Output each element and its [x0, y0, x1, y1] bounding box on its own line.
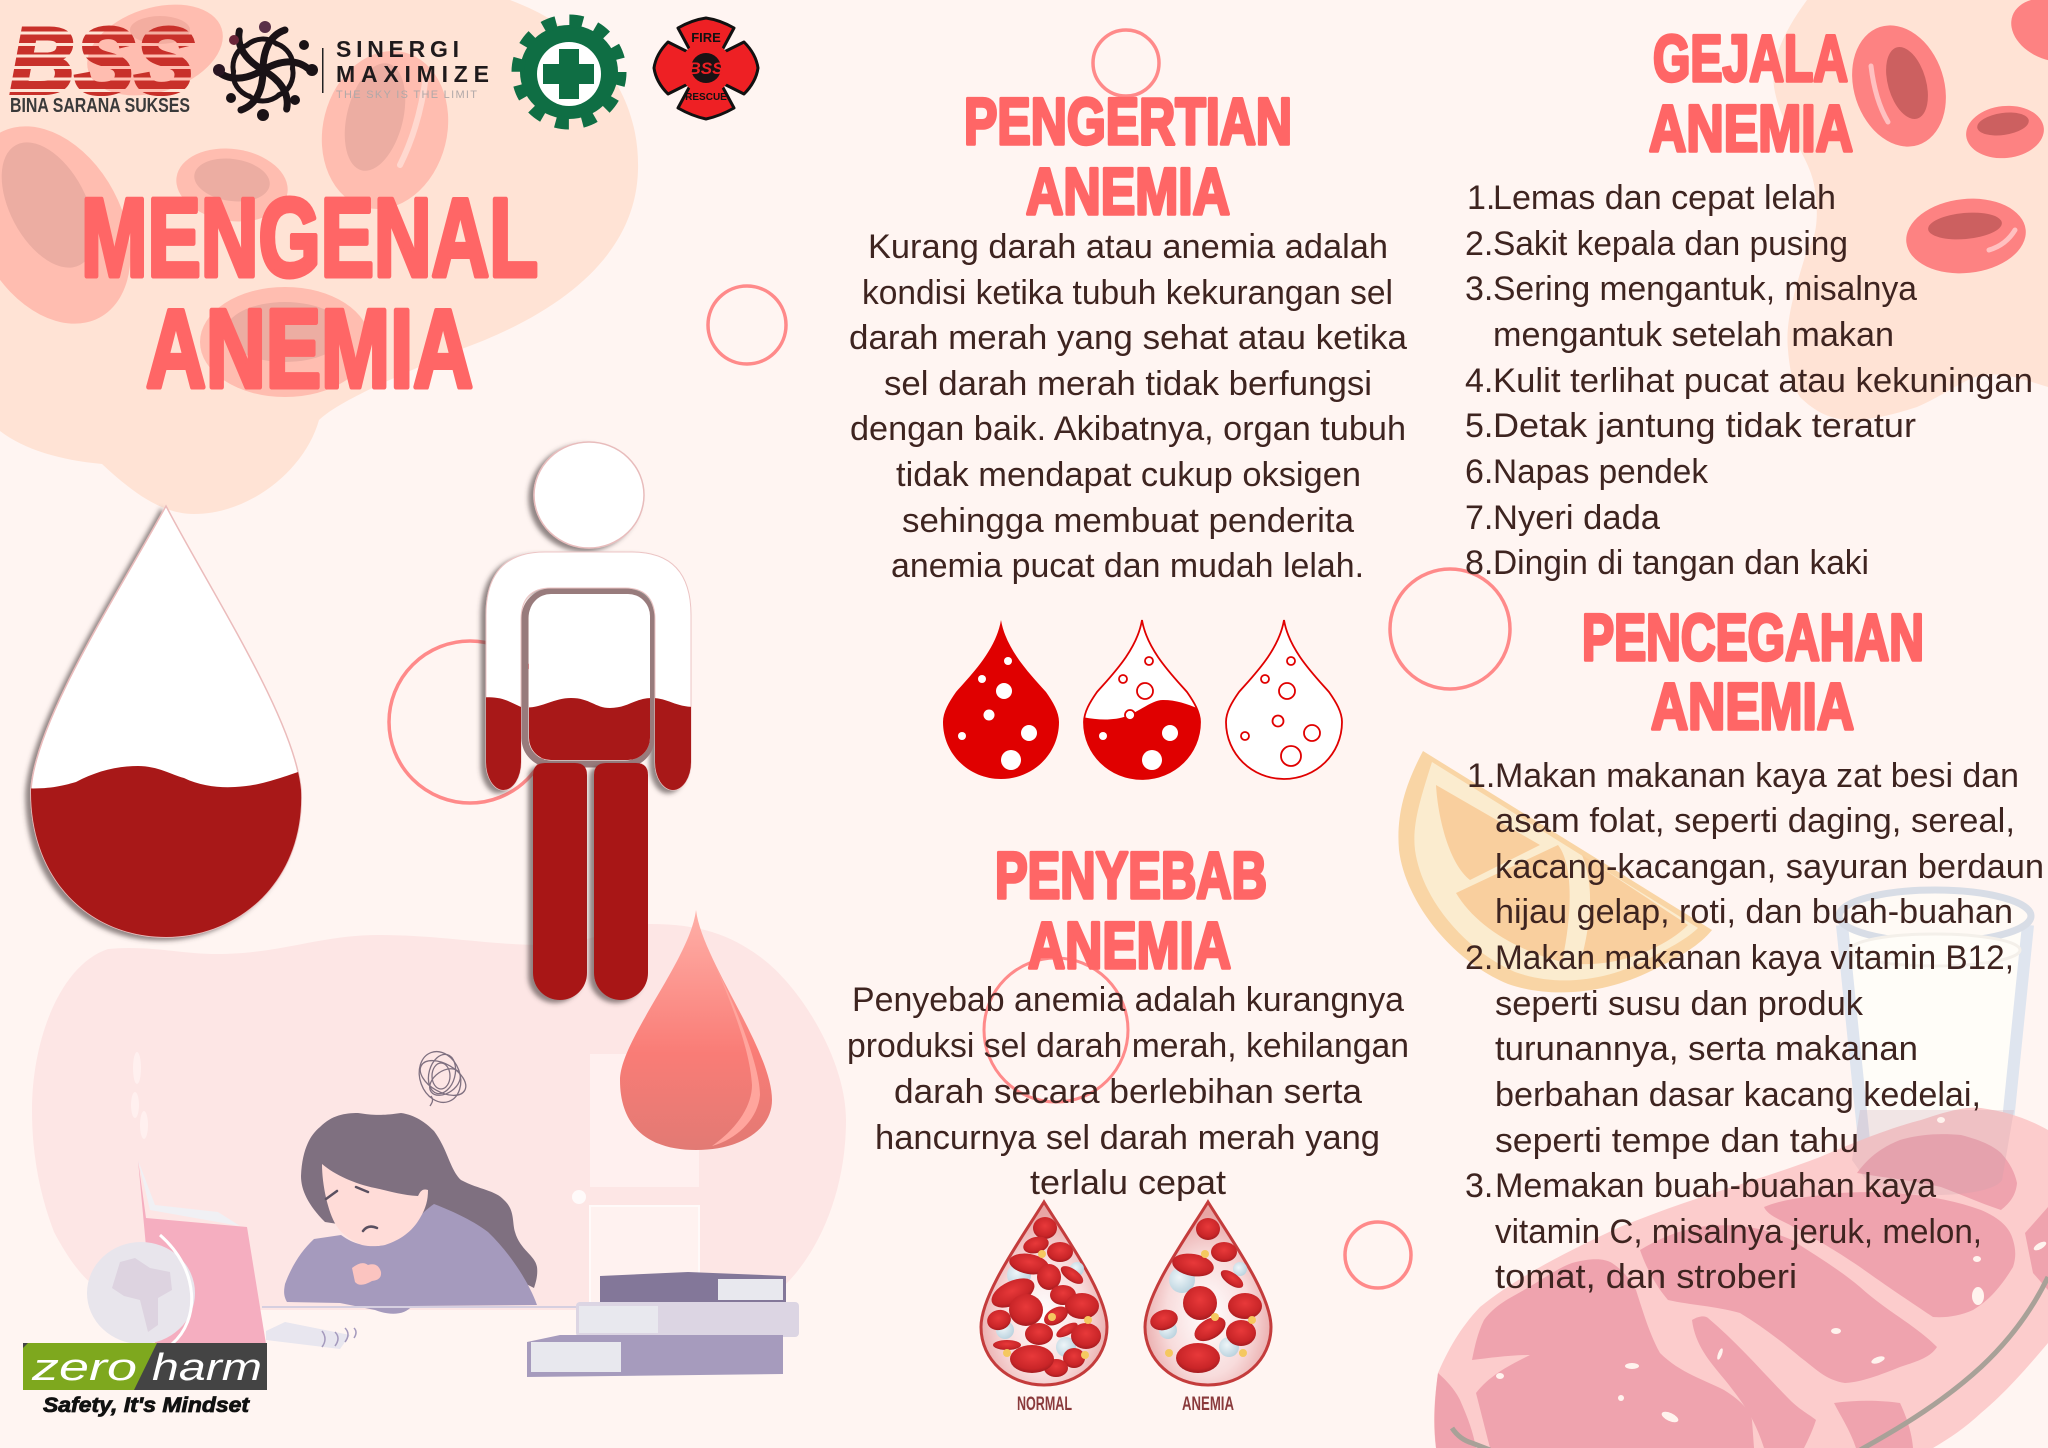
decorative ring, left: [708, 286, 786, 364]
logo: fire rescue badge: FIRE: [691, 30, 721, 45]
list: symptoms of anemia: [1465, 179, 2033, 582]
logo: Bina Sarana Sukses: BSS: [10, 8, 194, 113]
list: prevention of anemia: hijau gelap, roti, dan buah-buahan: [1495, 893, 2013, 931]
list: symptoms of anemia: 1.: [1467, 179, 1495, 217]
glass of milk: [1839, 890, 2031, 1195]
list: symptoms of anemia: 7.: [1465, 499, 1493, 537]
peach blob with blood cells, top right: [1773, 0, 2048, 420]
label: normal: NORMAL: [1017, 1394, 1072, 1415]
title: [81, 176, 538, 411]
heading: pengertian anemia: PENGERTIAN: [964, 84, 1292, 158]
heading: pencegahan anemia: PENCEGAHAN: [1582, 600, 1924, 674]
sweater: [284, 1204, 537, 1314]
list: prevention of anemia: 2.: [1465, 939, 1493, 977]
logo: green safety gear: [518, 21, 620, 123]
notebook: [266, 1322, 356, 1349]
list: symptoms of anemia: Lemas dan cepat lelah: [1493, 179, 1836, 217]
text: definition of anemia: tidak mendapat cukup oksigen: [896, 456, 1361, 494]
logo: fire rescue badge: [654, 18, 758, 119]
logo: Sinergi Maximize: THE SKY IS THE LIMIT: [336, 89, 477, 101]
logo: zero harm: [23, 1343, 267, 1417]
text: causes of anemia: Penyebab anemia adalah kurangnya: [852, 981, 1404, 1019]
text: definition of anemia: [849, 228, 1407, 585]
text: causes of anemia: terlalu cepat: [1030, 1164, 1227, 1202]
list: symptoms of anemia: Kulit terlihat pucat atau kekuningan: [1493, 362, 2033, 400]
list: symptoms of anemia: 6.: [1465, 453, 1493, 491]
illustration: window: [572, 1054, 699, 1310]
heading: penyebab anemia: PENYEBAB: [995, 838, 1267, 912]
list: prevention of anemia: seperti tempe dan tahu: [1495, 1122, 1859, 1160]
heading: pengertian anemia: ANEMIA: [1026, 154, 1230, 228]
logo: fire rescue badge: BSS: [689, 59, 724, 78]
steak on plate: [1434, 1108, 2048, 1448]
decorative ring, lower centre: [984, 958, 1128, 1102]
text: definition of anemia: sehingga membuat penderita: [902, 502, 1354, 540]
list: prevention of anemia: [1465, 757, 2044, 1296]
heading: gejala anemia: [1649, 21, 1853, 165]
list: symptoms of anemia: Detak jantung tidak teratur: [1493, 407, 1916, 445]
icon: full blood drop: [943, 620, 1059, 779]
logo: fire rescue badge: RESCUE: [685, 92, 727, 103]
logo: Bina Sarana Sukses: BINA SARANA SUKSES: [10, 95, 190, 117]
list: symptoms of anemia: Napas pendek: [1493, 453, 1709, 491]
decorative ring, bottom centre: [1345, 1222, 1411, 1288]
list: symptoms of anemia: mengantuk setelah makan: [1493, 316, 1894, 354]
list: symptoms of anemia: 4.: [1465, 362, 1493, 400]
illustration background blob: [32, 924, 846, 1310]
stack of books: [527, 1272, 799, 1377]
large pink drop: [620, 910, 772, 1150]
list: symptoms of anemia: Sering mengantuk, misalnya: [1493, 270, 1917, 308]
list: prevention of anemia: tomat, dan stroberi: [1495, 1258, 1797, 1296]
peach blob with blood cells, top left: [0, 0, 638, 514]
logo: Sinergi Maximize: [213, 21, 489, 121]
logo: zero harm: Safety, It's Mindset: [43, 1394, 250, 1417]
list: prevention of anemia: vitamin C, misalnya jeruk, melon,: [1495, 1213, 1982, 1251]
decorative ring, behind person: [389, 641, 551, 803]
list: symptoms of anemia: Sakit kepala dan pusing: [1493, 225, 1848, 263]
logo: Sinergi Maximize: MAXIMIZE: [336, 61, 489, 87]
diagram: normal blood drop: [981, 1202, 1107, 1385]
heading: gejala anemia: GEJALA: [1653, 21, 1848, 95]
list: prevention of anemia: asam folat, seperti daging, sereal,: [1495, 802, 2015, 840]
title: ANEMIA: [146, 287, 473, 411]
desk line: [262, 1306, 577, 1308]
globe: [87, 1235, 195, 1344]
label: anemia: ANEMIA: [1182, 1394, 1234, 1415]
text: causes of anemia: hancurnya sel darah merah yang: [875, 1119, 1380, 1157]
hair: [301, 1113, 537, 1288]
heading: gejala anemia: ANEMIA: [1649, 91, 1853, 165]
list: prevention of anemia: seperti susu dan produk: [1495, 985, 1864, 1023]
pink book: [138, 1160, 266, 1344]
heading: pencegahan anemia: ANEMIA: [1651, 669, 1854, 743]
decorative ring, top centre: [1093, 30, 1159, 96]
heading: penyebab anemia: ANEMIA: [1028, 908, 1231, 982]
list: prevention of anemia: kacang-kacangan, sayuran berdaun: [1495, 848, 2044, 886]
text: definition of anemia: kondisi ketika tubuh kekurangan sel: [862, 274, 1393, 312]
big blood drop, one third full: [31, 506, 301, 937]
heading: penyebab anemia: [995, 838, 1267, 982]
text: definition of anemia: dengan baik. Akibatnya, organ tubuh: [850, 410, 1406, 448]
diagram: anemia blood drop: [1145, 1202, 1271, 1385]
list: prevention of anemia: berbahan dasar kacang kedelai,: [1495, 1076, 1981, 1114]
text: causes of anemia: produksi sel darah merah, kehilangan: [847, 1027, 1409, 1065]
list: prevention of anemia: Makan makanan kaya zat besi dan: [1495, 757, 2019, 795]
scribble above head: [412, 1046, 472, 1108]
list: prevention of anemia: 1.: [1467, 757, 1495, 795]
faint plant: [131, 1052, 148, 1139]
logo: zero harm: zero: [31, 1347, 137, 1389]
list: prevention of anemia: turunannya, serta makanan: [1495, 1030, 1918, 1068]
face: [322, 1164, 428, 1246]
heading: pencegahan anemia: [1582, 600, 1924, 743]
text: definition of anemia: anemia pucat dan mudah lelah.: [891, 547, 1364, 585]
title: MENGENAL: [81, 176, 538, 300]
text: causes of anemia: darah secara berlebihan serta: [894, 1073, 1362, 1111]
decorative ring, middle right: [1390, 569, 1510, 689]
list: prevention of anemia: Makan makanan kaya vitamin B12,: [1495, 939, 2014, 977]
list: symptoms of anemia: Dingin di tangan dan kaki: [1493, 544, 1869, 582]
icon: empty blood drop: [1226, 620, 1342, 779]
person figure with low blood level: [486, 442, 691, 1000]
list: symptoms of anemia: Nyeri dada: [1493, 499, 1660, 537]
tired woman at desk illustration: [87, 1046, 799, 1377]
list: prevention of anemia: Memakan buah-buahan kaya: [1495, 1167, 1936, 1205]
hand: [352, 1263, 381, 1285]
list: symptoms of anemia: 8.: [1465, 544, 1493, 582]
eyes and mouth: [326, 1187, 377, 1231]
list: symptoms of anemia: 2.: [1465, 225, 1493, 263]
logo: zero harm: harm: [152, 1347, 262, 1389]
icon: half blood drop: [1082, 620, 1202, 785]
list: symptoms of anemia: 3.: [1465, 270, 1493, 308]
orange slice: [1398, 751, 1712, 992]
text: causes of anemia: [847, 981, 1409, 1202]
text: definition of anemia: sel darah merah tidak berfungsi: [884, 365, 1372, 403]
logo: Sinergi Maximize: SINERGI: [336, 36, 459, 62]
heading: pengertian anemia: [964, 84, 1292, 228]
list: symptoms of anemia: 5.: [1465, 407, 1493, 445]
text: definition of anemia: darah merah yang sehat atau ketika: [849, 319, 1407, 357]
text: definition of anemia: Kurang darah atau anemia adalah: [868, 228, 1388, 266]
list: prevention of anemia: 3.: [1465, 1167, 1493, 1205]
